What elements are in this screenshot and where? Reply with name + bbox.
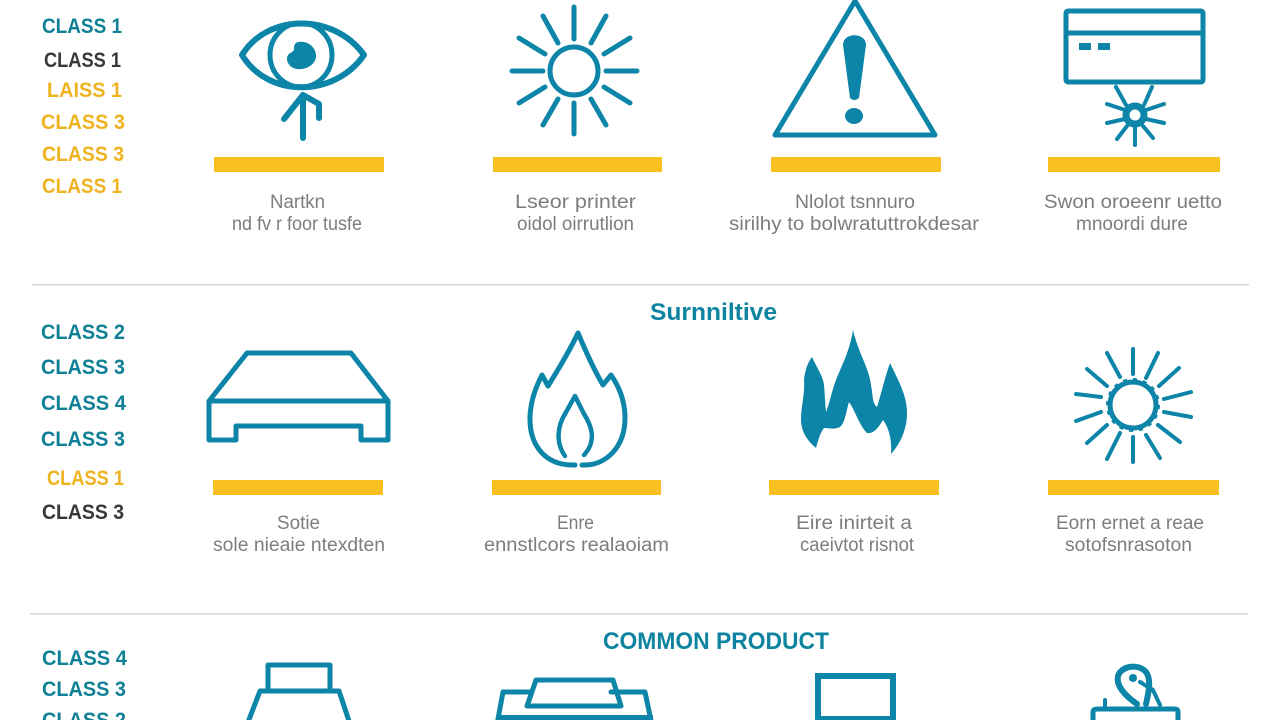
icon: product 1 xyxy=(245,665,352,720)
panel: row 1 class labels xyxy=(41,15,125,198)
text: row 1 captions: nd fv r foor tusfe xyxy=(232,214,362,235)
panel: row 2 class labels xyxy=(41,321,126,524)
panel: row 2 class labels: CLASS 4 xyxy=(41,392,126,415)
panel: row 1 class labels: CLASS 3 xyxy=(41,111,125,134)
panel: row 2 class labels: CLASS 2 xyxy=(41,321,125,344)
panel: row 2 class labels: CLASS 3 xyxy=(42,501,124,524)
text: row 2 captions: sotofsnrasoton xyxy=(1065,535,1192,556)
text: row 1 captions: Nartkn xyxy=(270,192,325,213)
icon: product 3 xyxy=(815,676,896,720)
text: row 1 captions xyxy=(232,192,1222,235)
icon: window with burst xyxy=(1066,11,1203,145)
text: row 1 captions: sirilhy to bolwratuttrokdesar xyxy=(729,214,980,235)
icon: warning triangle xyxy=(775,1,935,135)
text: row 2 captions: Eire inirteit a xyxy=(796,513,912,534)
text: row 2 captions xyxy=(213,513,1204,556)
bar: row 2 yellow rules xyxy=(213,480,1219,495)
text: row 1 captions: mnoordi dure xyxy=(1076,214,1188,235)
icon: radiating sun with gear ring xyxy=(1076,349,1191,462)
heading: section 2: Surnniltive xyxy=(650,299,777,326)
text: row 2 captions: Sotie xyxy=(277,513,320,534)
panel: row 2 class labels: CLASS 1 xyxy=(47,467,124,490)
panel: row 2 class labels: CLASS 3 xyxy=(41,356,125,379)
text: row 2 captions: Enre xyxy=(557,513,594,534)
text: row 1 captions: Nlolot tsnnuro xyxy=(795,192,915,213)
text: row 2 captions: Eorn ernet a reae xyxy=(1056,513,1204,534)
text: row 1 captions: Swon oroeenr uetto xyxy=(1044,192,1222,213)
panel: row 1 class labels: CLASS 1 xyxy=(42,175,122,198)
text: row 2 captions: caeivtot risnot xyxy=(800,535,915,556)
text: row 2 captions: ennstlcors realaoiam xyxy=(484,535,669,556)
panel: row 3 class labels: CLASS 4 xyxy=(42,647,127,670)
text: row 1 captions: Lseor printer xyxy=(515,192,637,213)
icon: eye with up arrow xyxy=(242,23,364,138)
heading: common product: COMMON PRODUCT xyxy=(603,628,829,655)
panel: row 1 class labels: CLASS 1 xyxy=(42,15,122,38)
icon: solid flame xyxy=(801,330,907,454)
icon: sun xyxy=(512,7,637,134)
text: row 1 captions: oidol oirrutlion xyxy=(517,214,634,235)
icon: product 4 xyxy=(1093,667,1178,720)
panel: row 1 class labels: LAISS 1 xyxy=(47,79,122,102)
icon: product 2 xyxy=(496,680,653,720)
bar: row 1 yellow rules xyxy=(214,157,1220,172)
icon: flat device xyxy=(209,353,388,440)
panel: row 2 class labels: CLASS 3 xyxy=(41,428,125,451)
icon: outline flame xyxy=(530,333,625,465)
panel: row 3 class labels: CLASS 3 xyxy=(42,678,126,701)
panel: row 3 class labels xyxy=(42,647,127,720)
text: row 2 captions: sole nieaie ntexdten xyxy=(213,535,385,556)
panel: row 1 class labels: CLASS 3 xyxy=(42,143,124,166)
panel: row 1 class labels: CLASS 1 xyxy=(44,49,121,72)
